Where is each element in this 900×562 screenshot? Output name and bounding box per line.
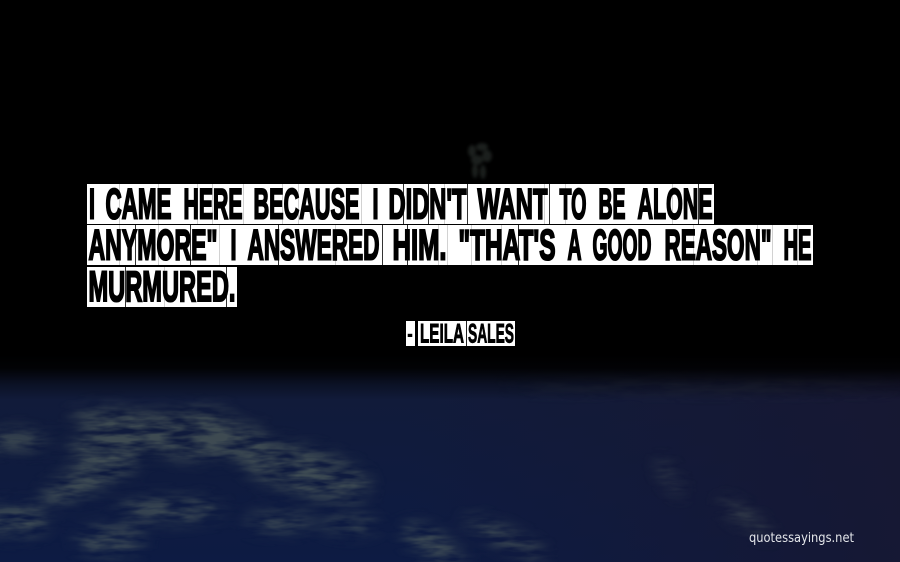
quote line 1: CAME bbox=[106, 180, 172, 228]
quote line 3: MURMURED. bbox=[88, 263, 236, 311]
clouds on earth surface bbox=[0, 381, 900, 562]
quote line 1 bbox=[87, 180, 714, 228]
quote text bbox=[87, 180, 813, 311]
quote line 2: HIM. bbox=[392, 222, 446, 270]
quote line 2: REASON" bbox=[664, 222, 772, 270]
watermark: quotessayings.net bbox=[749, 531, 854, 546]
quote line 2: "THAT'S bbox=[458, 222, 556, 270]
quote line 1: I bbox=[372, 180, 378, 228]
quote line 2: I bbox=[230, 222, 236, 270]
quote line 1: WANT bbox=[478, 180, 548, 228]
quote line 1: HERE bbox=[184, 180, 242, 228]
quote line 2: GOOD bbox=[592, 222, 652, 270]
quote line 2 bbox=[87, 222, 813, 270]
quote line 1: ALONE bbox=[638, 180, 712, 228]
icon: faint astronaut bbox=[468, 143, 492, 179]
quote line 1: BECAUSE bbox=[254, 180, 360, 228]
quote line 2: ANYMORE" bbox=[88, 222, 218, 270]
fade from space to horizon bbox=[0, 355, 900, 400]
quote line 1: TO bbox=[560, 180, 586, 228]
author attribution: SALES bbox=[468, 318, 514, 348]
quote line 2: ANSWERED bbox=[248, 222, 380, 270]
quote line 3 bbox=[87, 263, 237, 311]
quote line 1: DIDN'T bbox=[388, 180, 466, 228]
quote line 1: BE bbox=[598, 180, 626, 228]
quote line 1: I bbox=[89, 180, 95, 228]
quote line 2: A bbox=[568, 222, 582, 270]
text: HE bbox=[784, 222, 812, 270]
author attribution: - bbox=[407, 318, 413, 348]
author attribution: LEILA bbox=[420, 318, 464, 348]
